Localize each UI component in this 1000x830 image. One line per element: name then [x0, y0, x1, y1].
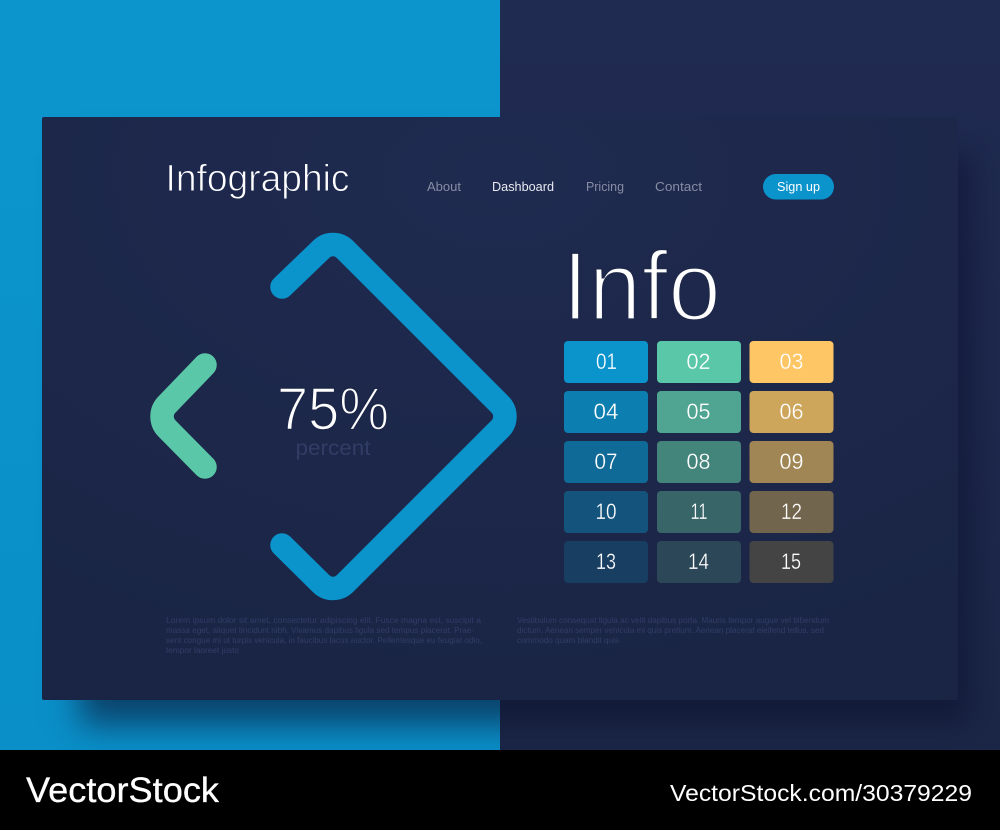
text block: left lorem: Lorem ipsum dolor sit amet, consectetur adipiscing elit. Fusce magna est, suscipit a — [166, 616, 482, 625]
chart: green remainder chevron — [162, 365, 205, 467]
tile 14 — [657, 541, 741, 583]
chart: blue rounded diamond 75 percent — [282, 245, 505, 588]
nav: about: About — [427, 179, 461, 194]
tile 11: 11 — [690, 499, 708, 524]
text block: left lorem — [166, 616, 482, 655]
tile 04 — [564, 391, 648, 433]
text block: right lorem: Vestibulum consequat ligula ac velit dapibus porta. Mauris tempor augue vel bibendum — [517, 616, 829, 625]
tile 08 — [657, 441, 741, 483]
background: blue left panel — [0, 0, 500, 750]
tile 08: 08 — [686, 449, 710, 474]
text block: right lorem: commodo quam blandit quis — [517, 636, 619, 645]
tile 09 — [750, 441, 834, 483]
bottom bar — [0, 750, 1000, 830]
tile 03: 03 — [780, 349, 804, 374]
label: percent: percent — [296, 437, 371, 460]
background: navy right panel — [500, 0, 1000, 750]
tile 12 — [750, 491, 834, 533]
button: sign up — [763, 174, 834, 200]
watermark left: VectorStock — [26, 771, 220, 810]
panel: main card — [42, 117, 958, 700]
tile 07 — [564, 441, 648, 483]
button: sign up: Sign up — [777, 179, 820, 194]
text block: right lorem: dictum. Aenean semper vehicula mi quis pretium. Aenean placerat eleifend tellus, sed — [517, 626, 824, 635]
heading: Info: Info — [562, 231, 721, 341]
tile 02 — [657, 341, 741, 383]
tile 13: 13 — [596, 549, 616, 574]
tile 04: 04 — [594, 399, 618, 424]
tile 12: 12 — [781, 499, 802, 524]
nav: pricing: Pricing — [586, 179, 624, 194]
tile 06: 06 — [780, 399, 804, 424]
title: Infographic — [166, 158, 350, 200]
tile 15 — [750, 541, 834, 583]
tile 01 — [564, 341, 648, 383]
tile 03 — [750, 341, 834, 383]
text block: left lorem: tempor laoreet justo — [166, 646, 240, 655]
tile 11 — [657, 491, 741, 533]
tile grid — [564, 341, 834, 583]
nav: contact: Contact — [655, 179, 702, 194]
tile 09: 09 — [780, 449, 804, 474]
text block: left lorem: massa eget, aliquet tincidunt nibh. Vivamus dapibus ligula sed tempus placerat. Prae- — [166, 626, 474, 635]
text block: right lorem — [517, 616, 829, 645]
watermark right: VectorStock.com/30379229 — [670, 780, 972, 806]
tile 07: 07 — [594, 449, 618, 474]
tile 05 — [657, 391, 741, 433]
tile 05: 05 — [686, 399, 710, 424]
value: 75%: 75% — [277, 376, 389, 442]
tile 01: 01 — [596, 349, 617, 374]
tile 15: 15 — [781, 549, 801, 574]
tile 02: 02 — [686, 349, 710, 374]
tile 13 — [564, 541, 648, 583]
text block: left lorem: sent congue mi ut turpis vehicula, in faucibus lacus auctor. Pellentesque eu feugiat odio, — [166, 636, 482, 645]
nav: dashboard: Dashboard — [492, 179, 554, 194]
card shadow — [80, 140, 955, 695]
tile 10: 10 — [596, 499, 616, 524]
tile 06 — [750, 391, 834, 433]
tile 10 — [564, 491, 648, 533]
tile 14: 14 — [688, 549, 709, 574]
